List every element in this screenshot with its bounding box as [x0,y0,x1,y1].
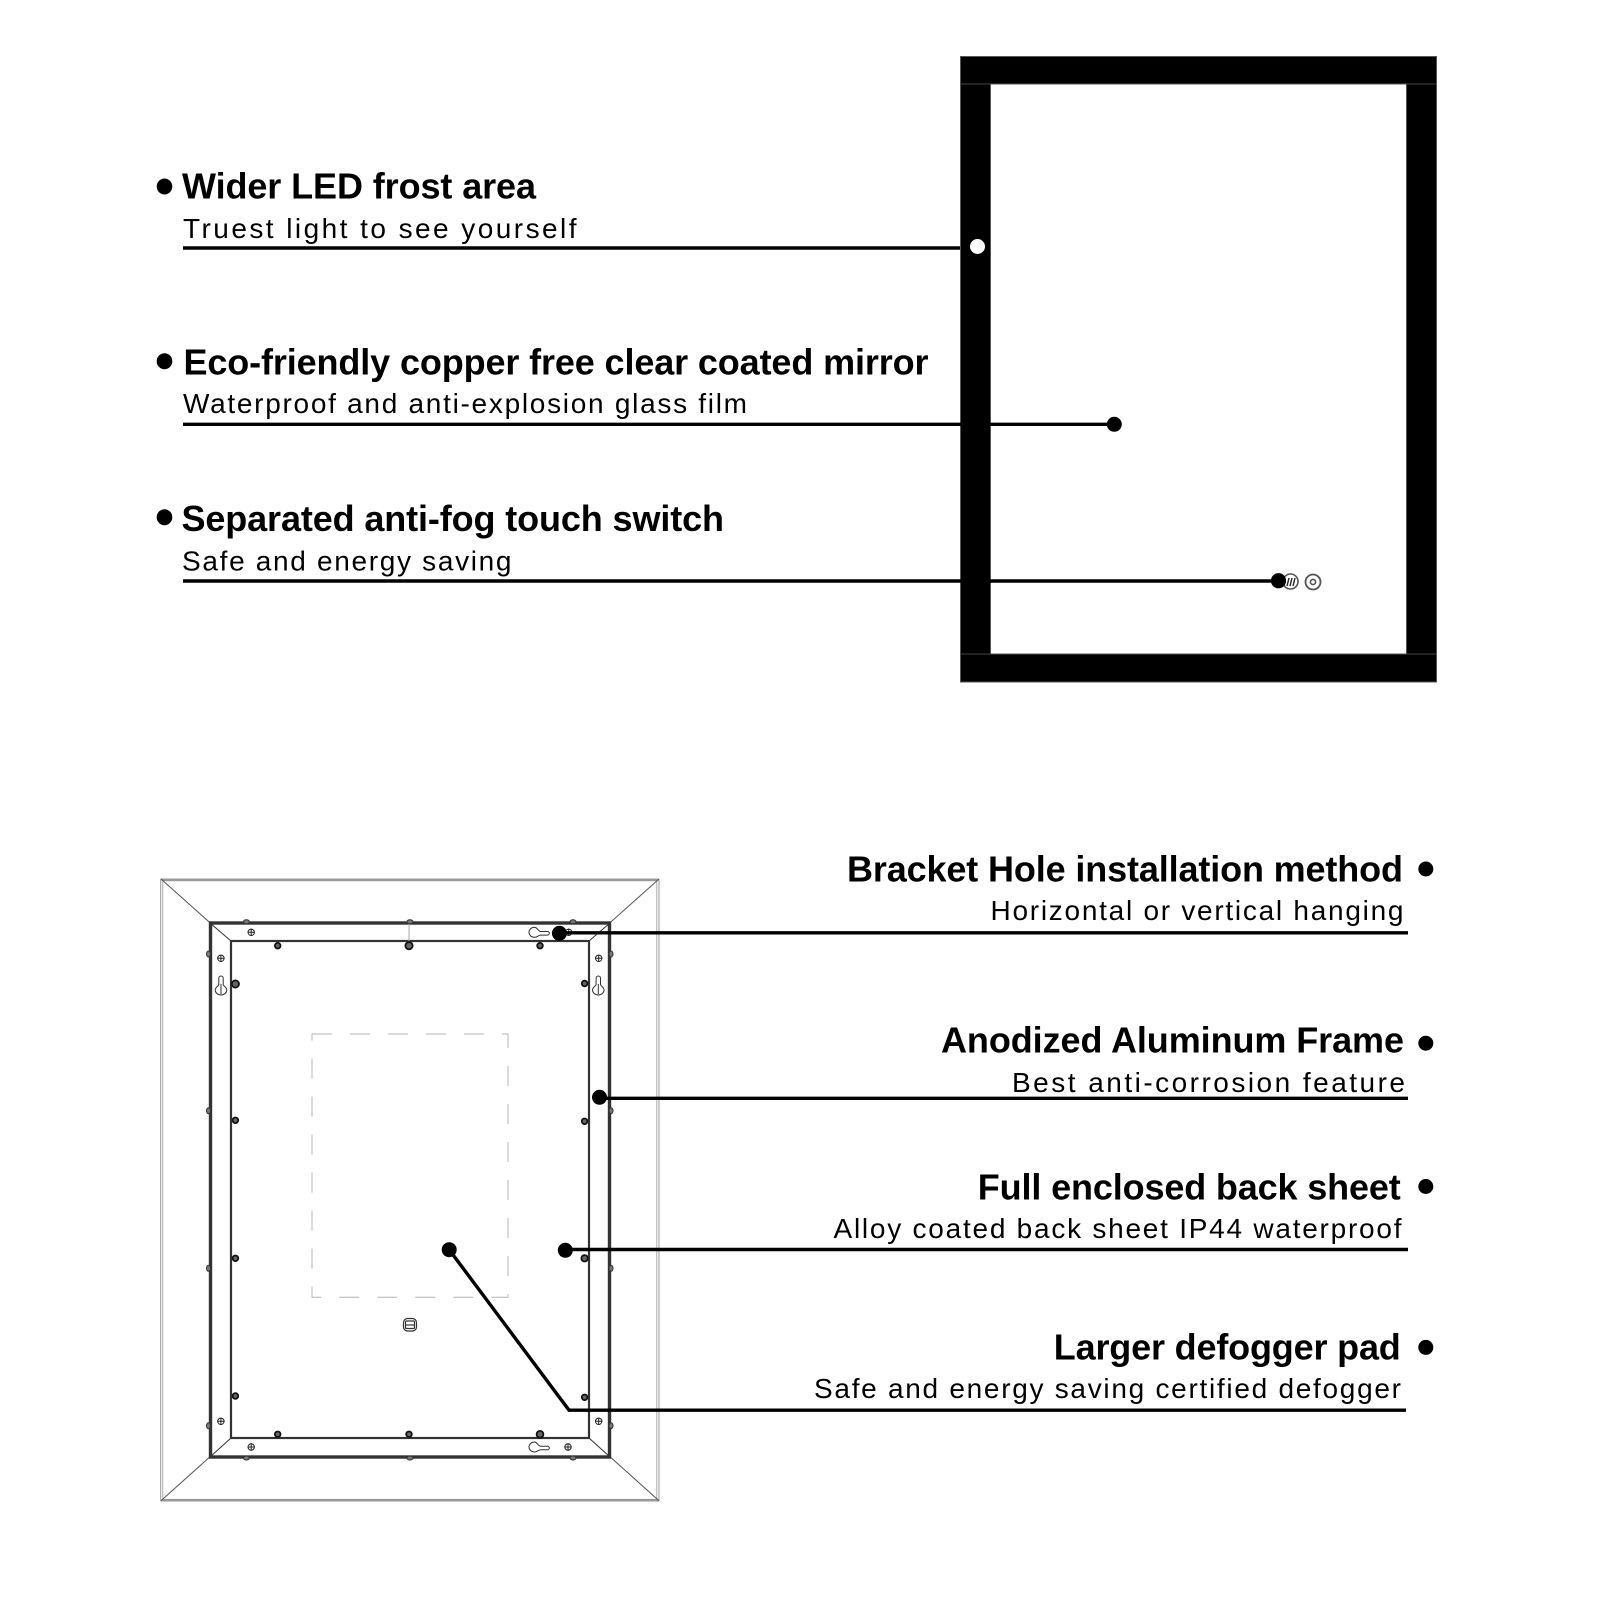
callout: full enclosed back sheet: Alloy coated back sheet IP44 waterproof [834,1213,1402,1244]
icon: anti-fog touch switch [1283,574,1298,589]
callout: separated anti-fog touch switch: Safe and energy saving [182,546,512,576]
callout: larger defogger pad [442,1242,1433,1410]
callout: bracket hole installation method: Horizontal or vertical hanging [990,895,1404,926]
callout: larger defogger pad: Larger defogger pad [1054,1327,1401,1368]
callout: larger defogger pad: Safe and energy saving certified defogger [814,1373,1401,1404]
callout: wider LED frost area: Wider LED frost area [182,165,537,206]
callout: separated anti-fog touch switch: Separated anti-fog touch switch [182,498,724,539]
callout: full enclosed back sheet: Full enclosed back sheet [978,1167,1401,1208]
callout: bracket hole installation method [552,848,1433,941]
callout: bracket hole installation method: Bracket Hole installation method [847,848,1403,889]
center plug [404,1318,416,1331]
callout: copper free clear coated mirror: Waterproof and anti-explosion glass film [183,388,747,419]
panel: front view of mirror with black LED frost frame [960,56,1436,682]
phillips screws [217,929,602,1451]
aluminum frame [210,923,610,1457]
callout: copper free clear coated mirror: Eco-friendly copper free clear coated mirror [184,342,928,382]
panel: rear view of mirror [161,879,659,1501]
callout: anodized aluminum frame: Best anti-corrosion feature [1012,1067,1405,1098]
rivets [232,942,588,1438]
outer glass outline [161,879,659,1501]
icon: power touch switch [1306,574,1320,590]
callout: copper free clear coated mirror [157,342,1122,432]
callout: wider LED frost area [157,165,985,254]
defogger pad dashed outline [312,1034,508,1297]
frame edge nubs [206,920,613,1460]
callout: separated anti-fog touch switch [157,498,1286,588]
callout: full enclosed back sheet [558,1167,1433,1258]
keyhole bracket slots [215,927,604,1452]
callout: anodized aluminum frame: Anodized Aluminum Frame [941,1019,1404,1060]
callout: wider LED frost area: Truest light to see yourself [183,213,577,244]
callout: anodized aluminum frame [592,1019,1433,1105]
